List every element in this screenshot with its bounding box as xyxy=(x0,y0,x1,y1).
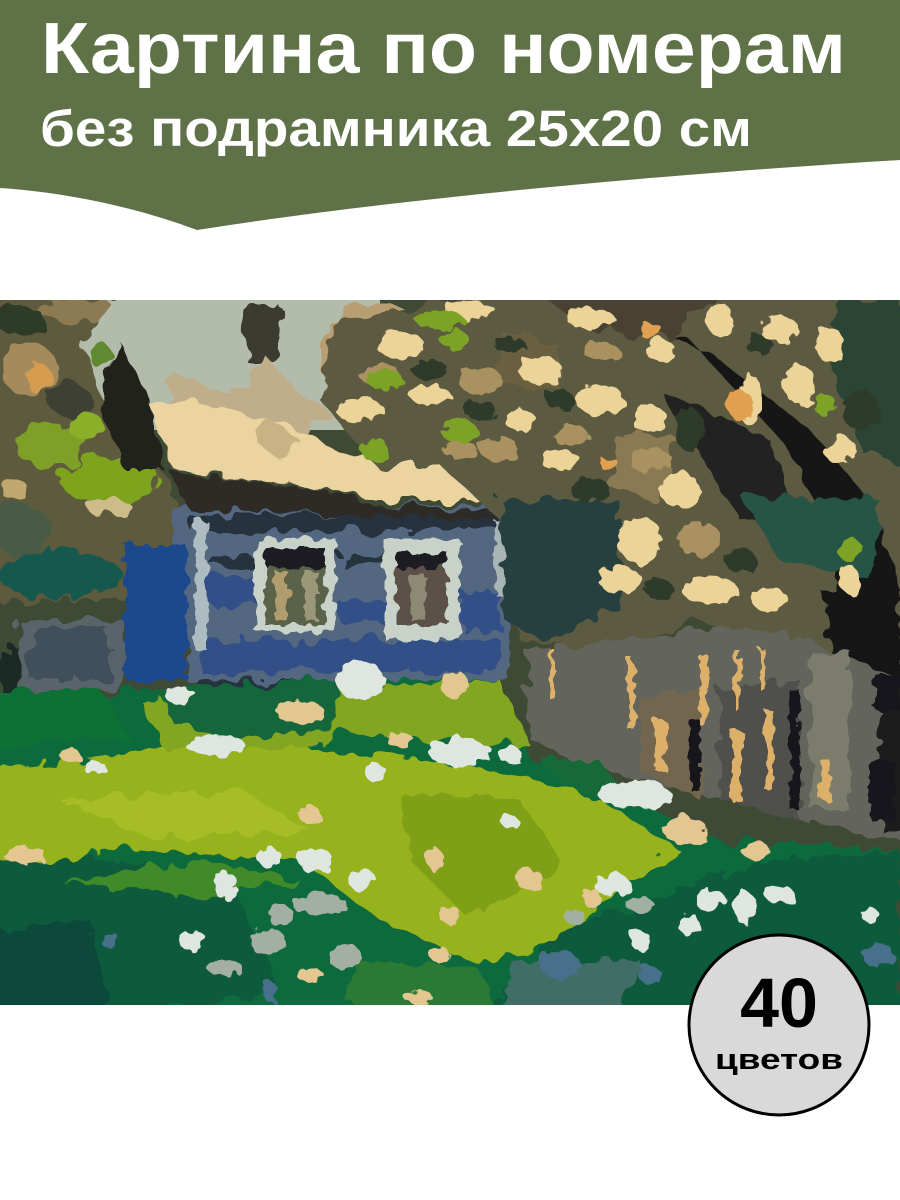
foliage dark masses xyxy=(674,336,900,676)
right tree background xyxy=(320,290,900,680)
door xyxy=(125,545,187,680)
white flowers xyxy=(83,660,879,950)
header banner xyxy=(0,0,900,230)
sky xyxy=(50,300,380,430)
subtitle: без подрамника 25х20 см xyxy=(40,100,752,157)
badge: 40 colours xyxy=(689,935,869,1115)
dark leaves xyxy=(412,335,878,600)
title: Картина по номерам xyxy=(41,9,846,89)
painting xyxy=(0,290,900,1020)
badge: 40 colours: 40 xyxy=(740,964,818,1042)
roof xyxy=(150,402,530,508)
badge: 40 colours: цветов xyxy=(715,1044,843,1076)
grass and garden xyxy=(0,680,900,1020)
upper left tree xyxy=(0,290,190,600)
windows xyxy=(195,520,507,650)
fence xyxy=(525,625,900,840)
house wall xyxy=(170,505,510,685)
roof peak and chimney xyxy=(100,305,400,470)
porch xyxy=(20,620,125,690)
fence highlights xyxy=(550,650,830,800)
cream leaves xyxy=(336,301,860,612)
